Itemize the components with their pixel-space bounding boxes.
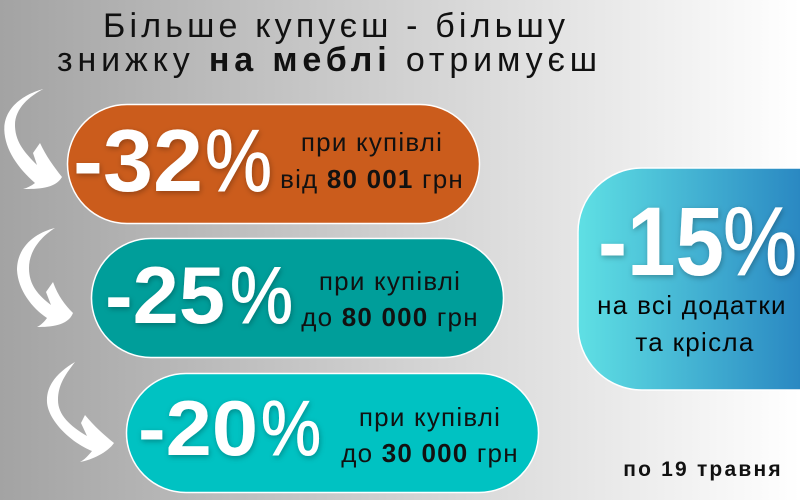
condition text 25%: при купівлі xyxy=(319,266,461,296)
title xyxy=(57,7,597,79)
condition text 32% xyxy=(280,127,464,194)
condition text 25% xyxy=(301,266,479,332)
side text: та крісла xyxy=(635,327,755,357)
condition text 20%: до 30 000 грн xyxy=(341,438,519,468)
discount value 32%: -32 xyxy=(73,111,203,210)
panel: 20% discount xyxy=(126,374,538,492)
side text xyxy=(597,290,787,357)
condition text 32%: при купівлі xyxy=(301,127,443,157)
panel: 25% discount xyxy=(92,238,504,358)
deadline note: по 19 травня xyxy=(623,458,783,481)
panel: 32% discount xyxy=(68,104,480,224)
title: Більше купуєш - більшу xyxy=(103,7,565,45)
title: знижку на меблі отримуєш xyxy=(57,41,597,79)
panel: 15% on accessories and chairs xyxy=(578,168,800,390)
arrow: to 20% tier xyxy=(47,362,114,462)
condition text 25%: до 80 000 грн xyxy=(301,302,479,332)
discount value 20%: % xyxy=(261,384,321,472)
discount value 20%: -20 xyxy=(138,384,258,472)
discount value 32%: % xyxy=(205,111,272,210)
discount value 25%: -25 xyxy=(105,251,225,341)
condition text 20%: при купівлі xyxy=(359,402,501,432)
condition text 32%: від 80 001 грн xyxy=(280,164,464,194)
arrow: to 32% tier xyxy=(4,89,62,189)
arrow: to 25% tier xyxy=(17,228,73,327)
discount value 25%: % xyxy=(230,251,293,341)
side text: на всі додатки xyxy=(597,290,787,320)
discount value 15%: -15 xyxy=(598,187,724,296)
condition text 20% xyxy=(341,402,519,468)
